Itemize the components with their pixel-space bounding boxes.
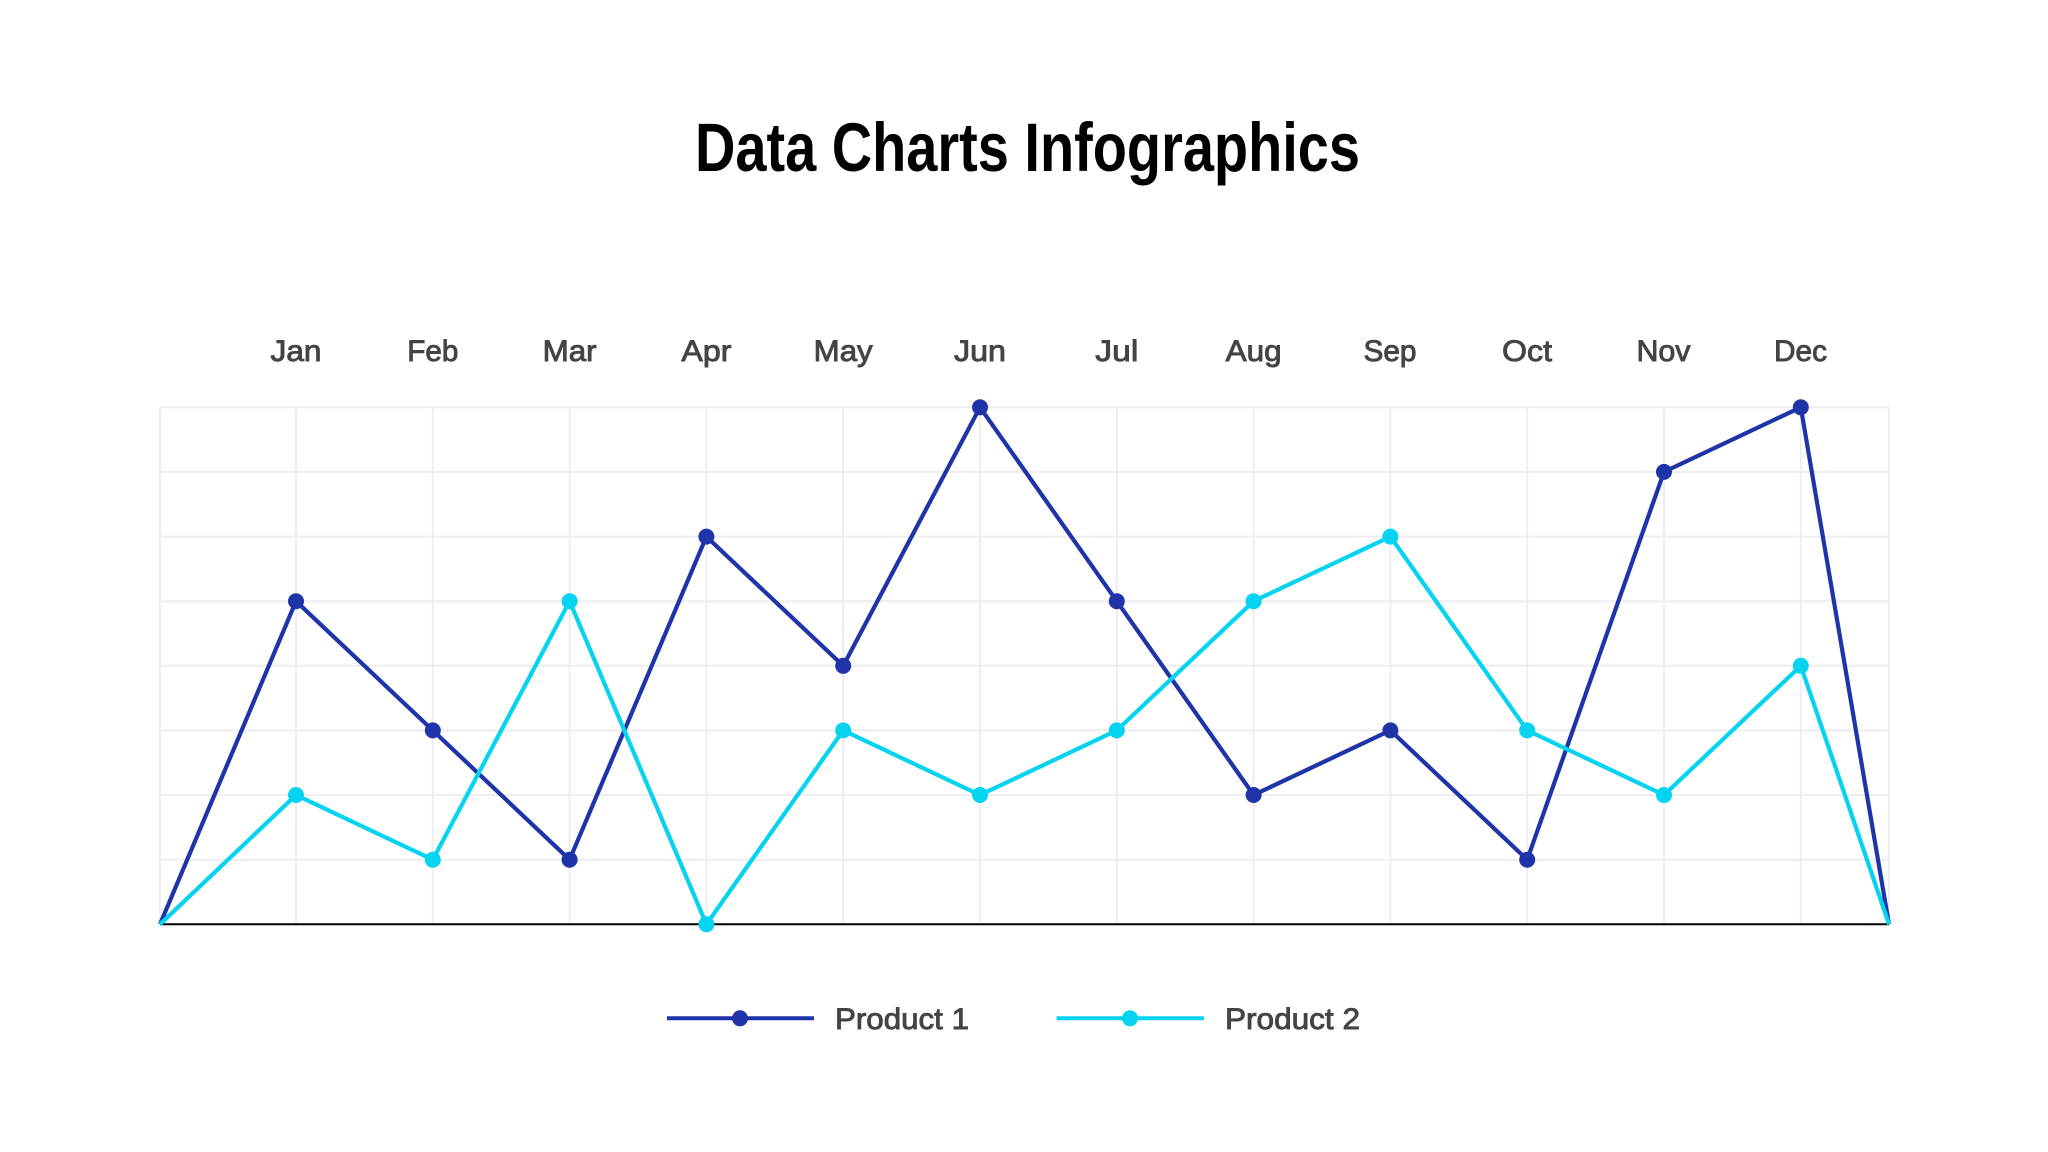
x axis baseline (160, 923, 1889, 925)
month labels: Nov (1636, 335, 1690, 368)
month labels: Jul (1095, 335, 1138, 368)
legend (667, 1003, 1360, 1036)
title: Data Charts Infographics (695, 109, 1360, 186)
legend item: Product 2: Product 2 (1225, 1003, 1360, 1036)
month labels: Sep (1364, 335, 1416, 368)
line series: Product 1 (160, 399, 1889, 924)
legend item: Product 1 (667, 1003, 969, 1036)
month labels: Oct (1502, 335, 1553, 368)
chart grid (160, 407, 1889, 924)
month labels: Aug (1226, 335, 1282, 368)
legend item: Product 2 (1056, 1003, 1360, 1036)
month labels: Jun (954, 335, 1006, 368)
month labels: May (814, 335, 873, 368)
month labels: Jan (270, 335, 322, 368)
month labels: Mar (543, 335, 597, 368)
month labels (270, 335, 1827, 368)
month labels: Apr (681, 335, 731, 368)
legend item: Product 1: Product 1 (835, 1003, 969, 1036)
month labels: Feb (407, 335, 458, 368)
line series: Product 2 (160, 529, 1889, 932)
month labels: Dec (1774, 335, 1827, 368)
